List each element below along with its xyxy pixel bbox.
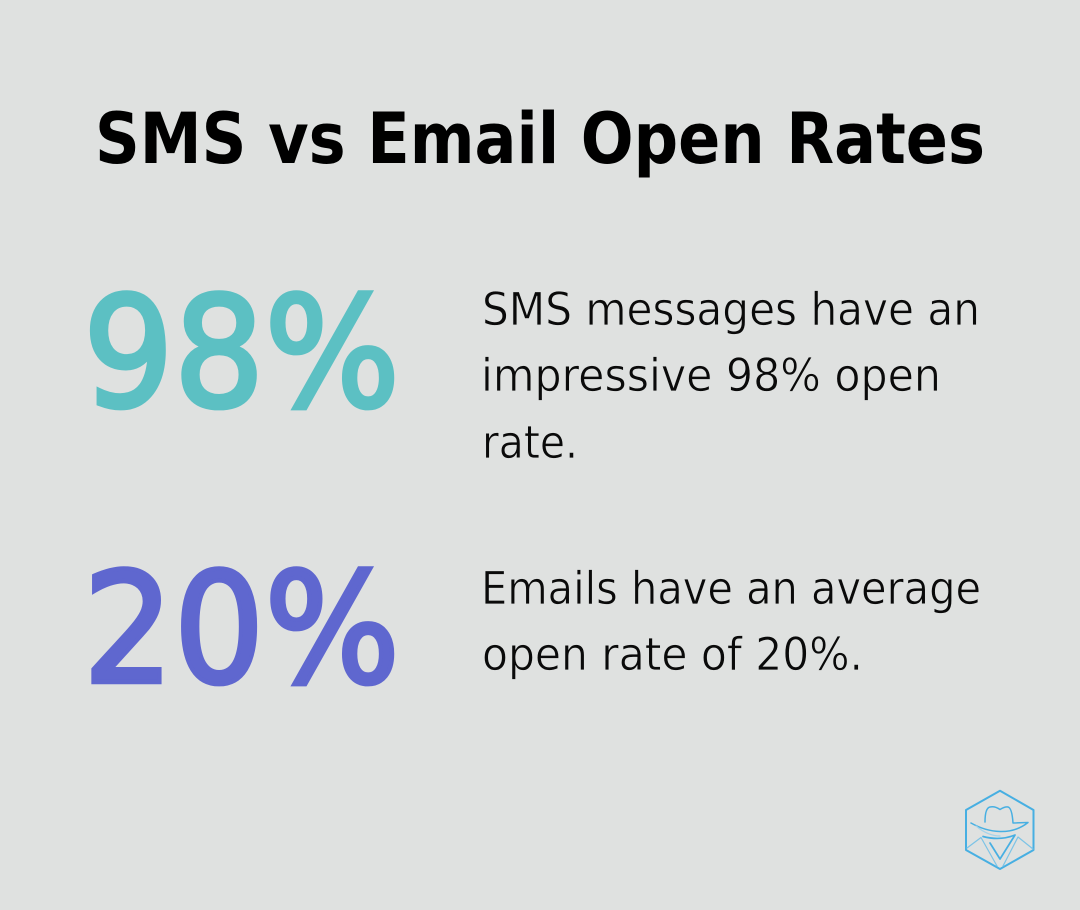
description: SMS open rate: impressive 98% open xyxy=(481,349,941,402)
description: SMS open rate xyxy=(481,283,980,469)
title: SMS vs Email Open Rates xyxy=(95,98,985,180)
description: SMS open rate: rate. xyxy=(482,416,578,469)
description: email open rate: open rate of 20%. xyxy=(482,628,863,681)
icon: spy logo in hexagon xyxy=(966,791,1034,869)
description: SMS open rate: SMS messages have an xyxy=(482,283,980,336)
description: email open rate: Emails have an average xyxy=(481,562,981,615)
stat: 20%: 20% xyxy=(83,541,400,719)
description: email open rate xyxy=(481,562,981,681)
stat: 98%: 98% xyxy=(83,265,400,443)
